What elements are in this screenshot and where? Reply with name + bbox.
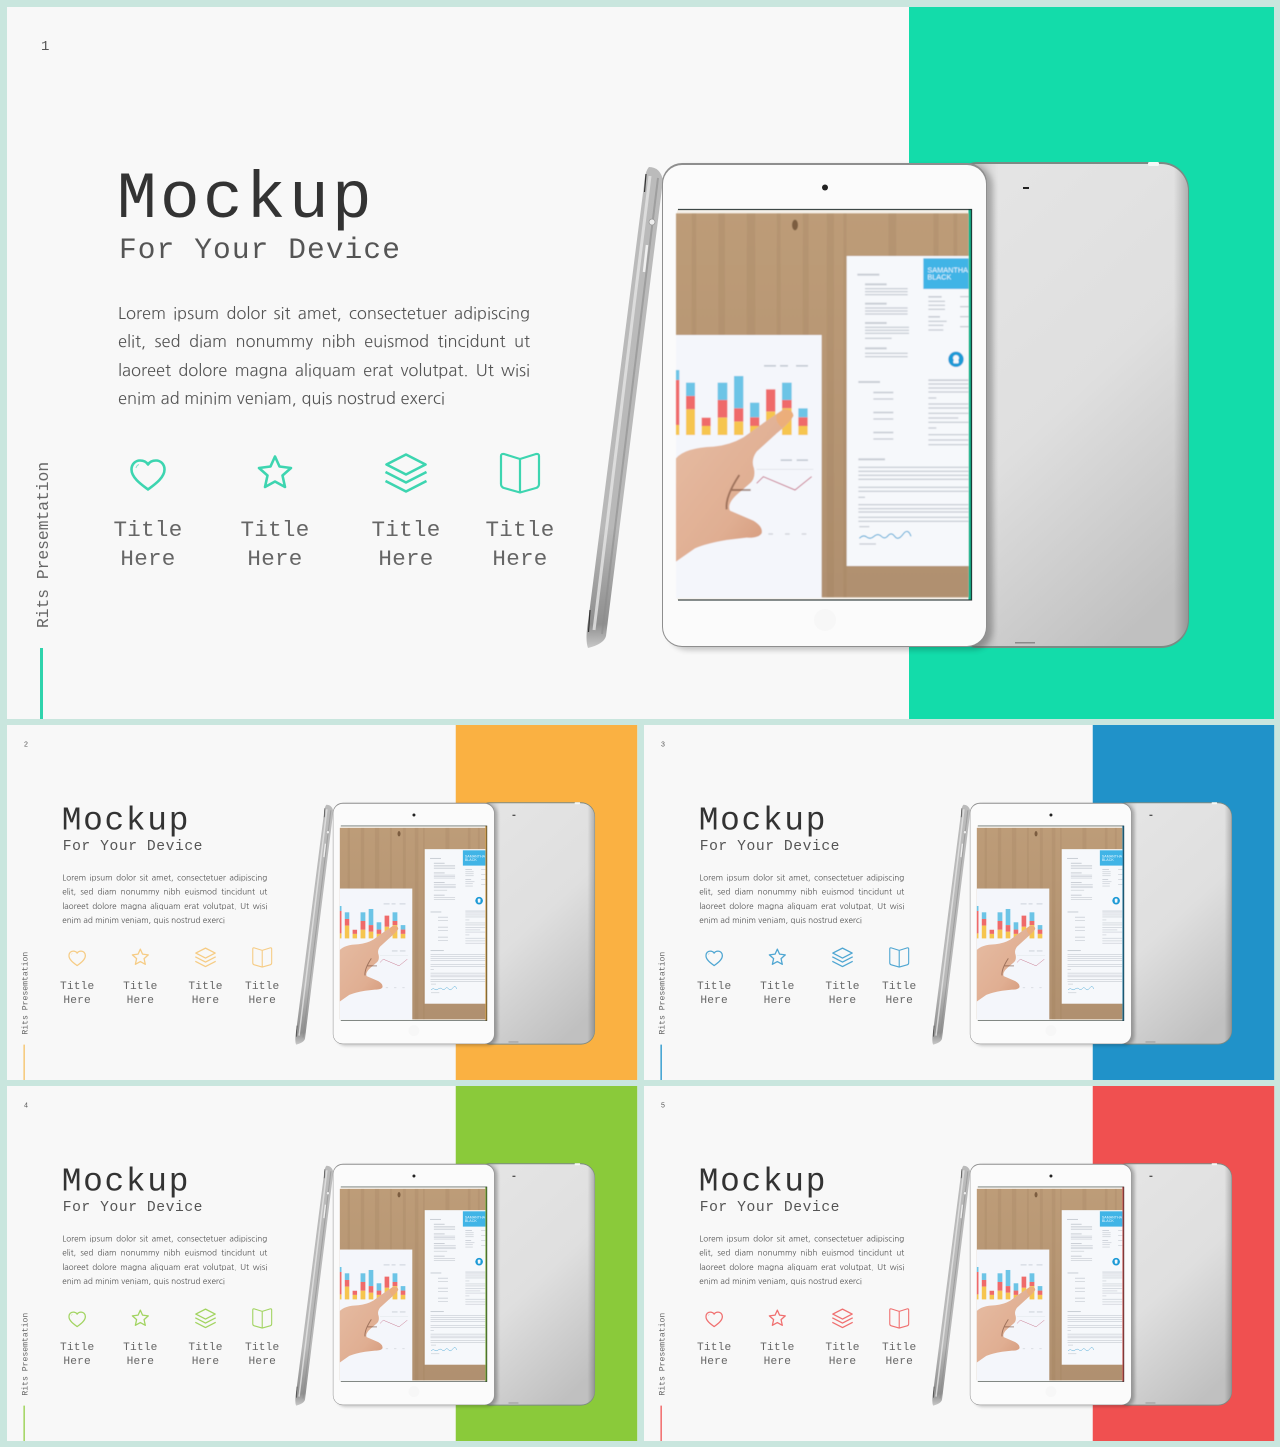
body text: laoreet dolore magna aliquam erat volutpat. Ut wisi bbox=[699, 1263, 904, 1271]
icon: star bbox=[768, 1309, 786, 1326]
subtitle: For Your Device bbox=[119, 233, 401, 267]
body text: elit, sed diam nonummy nibh euismod tincidunt ut bbox=[699, 1249, 904, 1257]
subtitle: For Your Device bbox=[63, 1199, 203, 1216]
icon: star bbox=[132, 1310, 149, 1326]
label 3 bbox=[188, 979, 223, 1007]
body text: enim ad minim veniam, quis nostrud exerci bbox=[699, 917, 862, 925]
accent rule bbox=[660, 1045, 662, 1080]
body text: enim ad minim veniam, quis nostrud exerci bbox=[62, 917, 225, 925]
label 2 bbox=[123, 979, 157, 1007]
label 4: Here bbox=[492, 546, 548, 572]
label 2: Here bbox=[247, 546, 303, 572]
label 2: Title bbox=[760, 979, 794, 992]
label 1: Title bbox=[697, 979, 731, 992]
page number: 5 bbox=[661, 1102, 665, 1110]
label 1 bbox=[697, 979, 731, 1007]
label 4 bbox=[485, 517, 554, 572]
label 4: Title bbox=[882, 1340, 916, 1353]
icon: heart bbox=[68, 1312, 86, 1328]
tablet mockup bbox=[644, 1086, 1274, 1441]
label 1: Here bbox=[120, 546, 176, 572]
label 2: Title bbox=[760, 1340, 794, 1353]
body text: Lorem ipsum dolor sit amet, consectetuer adipiscing bbox=[699, 874, 904, 882]
icon: heart bbox=[705, 1311, 723, 1327]
label 3: Title bbox=[371, 517, 440, 543]
label 1 bbox=[60, 979, 94, 1007]
label 1: Title bbox=[697, 1340, 731, 1353]
page number: 1 bbox=[41, 39, 49, 55]
body text bbox=[62, 1235, 268, 1286]
icon: layers bbox=[195, 948, 216, 968]
label 3: Title bbox=[825, 1340, 860, 1353]
icon: book bbox=[500, 452, 540, 494]
body text bbox=[699, 1232, 904, 1289]
title: Mockup bbox=[699, 802, 827, 840]
icon: heart bbox=[705, 950, 723, 966]
body text bbox=[62, 874, 268, 925]
label 1 bbox=[684, 1340, 744, 1369]
tablet mockup bbox=[932, 802, 1232, 1048]
body text: Lorem ipsum dolor sit amet, consectetuer adipiscing bbox=[62, 1235, 267, 1243]
body text bbox=[118, 306, 530, 407]
icon: star bbox=[768, 948, 786, 965]
label 4: Title bbox=[245, 979, 279, 992]
tablet mockup bbox=[586, 162, 1189, 653]
label 3 bbox=[825, 979, 860, 1007]
page number: 4 bbox=[24, 1102, 28, 1110]
page number: 2 bbox=[24, 741, 28, 749]
vertical label: Rits Presemtation bbox=[20, 952, 30, 1035]
vertical label: Rits Presemtation bbox=[657, 1313, 667, 1396]
colour panel bbox=[456, 725, 637, 1080]
body text: enim ad minim veniam, quis nostrud exerci bbox=[699, 1278, 862, 1286]
label 4: Here bbox=[248, 1355, 276, 1368]
label 3: Title bbox=[825, 979, 860, 992]
label 4: Here bbox=[885, 1355, 913, 1368]
label 1: Here bbox=[700, 1355, 728, 1368]
body text bbox=[699, 874, 904, 925]
label 3: Here bbox=[829, 1355, 856, 1368]
label 3: Here bbox=[829, 994, 856, 1007]
label 4: Title bbox=[245, 1340, 279, 1353]
body text: laoreet dolore magna aliquam erat volutpat. Ut wisi bbox=[699, 902, 904, 910]
label 2 bbox=[123, 1340, 157, 1368]
label 2: Title bbox=[240, 517, 310, 543]
label 1: Here bbox=[63, 994, 91, 1007]
label 3: Title bbox=[188, 1340, 223, 1353]
body text: laoreet dolore magna aliquam erat volutpat. Ut wisi bbox=[62, 1263, 267, 1271]
body text: Lorem ipsum dolor sit amet, consectetuer adipiscing bbox=[699, 1235, 904, 1243]
label 2: Here bbox=[764, 1355, 791, 1368]
icon: heart bbox=[68, 950, 86, 966]
label 3: Title bbox=[188, 979, 223, 992]
accent rule bbox=[23, 1045, 25, 1080]
colour panel bbox=[1093, 725, 1274, 1080]
icon: star bbox=[258, 455, 292, 488]
label 1: Title bbox=[60, 1340, 94, 1353]
label 1: Here bbox=[63, 1355, 91, 1368]
icon: book bbox=[252, 1308, 272, 1329]
label 2: Here bbox=[127, 994, 154, 1007]
icon: star bbox=[132, 948, 149, 965]
icon: layers bbox=[832, 948, 853, 968]
title: Mockup bbox=[62, 802, 190, 840]
icon: book bbox=[889, 1308, 910, 1329]
label 2: Title bbox=[123, 979, 157, 992]
title: Mockup bbox=[699, 1163, 827, 1201]
body text: elit, sed diam nonummy nibh euismod tincidunt ut bbox=[62, 1249, 267, 1257]
body text: Lorem ipsum dolor sit amet, consectetuer adipiscing bbox=[118, 306, 530, 322]
icon: book bbox=[889, 947, 910, 968]
label 1 bbox=[113, 517, 182, 572]
vertical label: Rits Presemtation bbox=[34, 462, 53, 628]
icon: layers bbox=[832, 1308, 853, 1328]
label 4: Title bbox=[485, 517, 554, 543]
slide 3: blue bbox=[644, 725, 1274, 1080]
slide 5: red bbox=[644, 1086, 1274, 1441]
colour panel bbox=[456, 1086, 637, 1441]
label 4: Here bbox=[248, 994, 276, 1007]
label 4 bbox=[869, 1340, 929, 1369]
page number: 3 bbox=[661, 741, 665, 749]
body text: enim ad minim veniam, quis nostrud exerci bbox=[118, 391, 445, 407]
label 4 bbox=[245, 979, 279, 1007]
body text: laoreet dolore magna aliquam erat volutpat. Ut wisi bbox=[118, 363, 530, 379]
label 2 bbox=[760, 979, 794, 1007]
label 3 bbox=[371, 517, 440, 572]
accent rule bbox=[660, 1406, 662, 1441]
label 3: Here bbox=[192, 994, 219, 1007]
icon: layers bbox=[385, 453, 427, 493]
accent rule bbox=[23, 1406, 25, 1441]
body text: elit, sed diam nonummy nibh euismod tincidunt ut bbox=[118, 334, 530, 350]
label 4: Here bbox=[885, 994, 913, 1007]
label 2: Here bbox=[764, 994, 791, 1007]
title: Mockup bbox=[117, 162, 375, 237]
label 4 bbox=[245, 1340, 279, 1368]
subtitle: For Your Device bbox=[700, 1199, 840, 1216]
label 4: Title bbox=[882, 979, 916, 992]
slide 1: teal bbox=[7, 7, 1274, 719]
label 2: Here bbox=[127, 1355, 154, 1368]
label 1: Title bbox=[113, 517, 182, 543]
label 4 bbox=[882, 979, 916, 1007]
icon: layers bbox=[195, 1308, 216, 1328]
label 3 bbox=[188, 1340, 223, 1368]
label 2 bbox=[240, 517, 310, 572]
subtitle: For Your Device bbox=[700, 838, 840, 855]
tablet mockup bbox=[295, 802, 596, 1048]
colour panel bbox=[909, 7, 1274, 719]
label 2 bbox=[747, 1340, 807, 1369]
body text: laoreet dolore magna aliquam erat volutpat. Ut wisi bbox=[62, 902, 267, 910]
label 2: Title bbox=[123, 1340, 157, 1353]
label 3 bbox=[813, 1340, 872, 1369]
body text: elit, sed diam nonummy nibh euismod tincidunt ut bbox=[699, 888, 904, 896]
slide 2: orange bbox=[7, 725, 637, 1080]
icon: book bbox=[252, 947, 272, 968]
icon: heart bbox=[130, 459, 166, 491]
subtitle: For Your Device bbox=[63, 838, 203, 855]
body text: elit, sed diam nonummy nibh euismod tincidunt ut bbox=[62, 888, 267, 896]
slide 4: green bbox=[7, 1086, 637, 1441]
label 3: Here bbox=[192, 1355, 219, 1368]
title: Mockup bbox=[62, 1163, 190, 1201]
tablet mockup bbox=[295, 1163, 595, 1408]
label 1: Title bbox=[60, 979, 94, 992]
body text: enim ad minim veniam, quis nostrud exerci bbox=[62, 1278, 225, 1286]
colour panel bbox=[1093, 1086, 1274, 1441]
vertical label: Rits Presemtation bbox=[20, 1313, 30, 1396]
label 1 bbox=[60, 1340, 94, 1368]
accent rule bbox=[40, 648, 43, 719]
label 1: Here bbox=[700, 994, 728, 1007]
label 3: Here bbox=[378, 546, 434, 572]
body text: Lorem ipsum dolor sit amet, consectetuer adipiscing bbox=[62, 874, 267, 882]
vertical label: Rits Presemtation bbox=[657, 952, 667, 1035]
